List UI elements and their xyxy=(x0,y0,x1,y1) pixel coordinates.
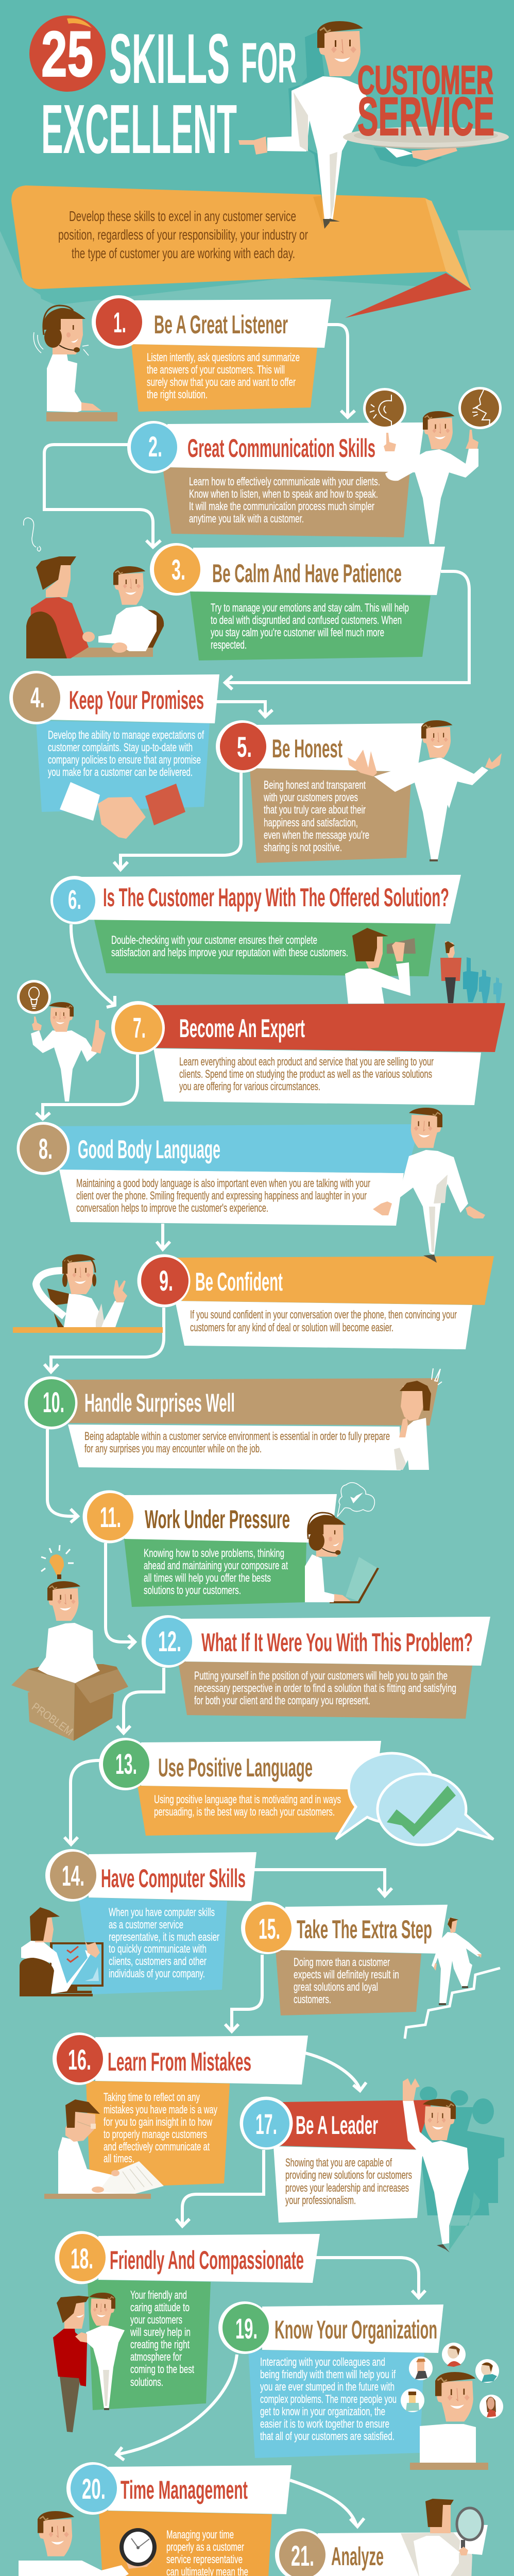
skill 19 text: that all of your customers are satisfied. xyxy=(260,2430,395,2443)
skill 14 number badge: 14. xyxy=(62,1859,84,1892)
skill 11 text: Knowing how to solve problems, thinking xyxy=(144,1547,284,1560)
skill 6 number badge: 6. xyxy=(68,885,81,915)
arrow 18 to 19 xyxy=(316,2258,425,2298)
skill 4 text: you make for a customer can be delivered. xyxy=(48,766,193,778)
skill 21 number badge: 21. xyxy=(291,2539,314,2572)
intro text: Develop these skills to excel in any customer service xyxy=(69,208,296,224)
skill 5 title: Be Honest xyxy=(272,734,342,763)
skill 8 body panel xyxy=(59,1170,404,1226)
skill 8 text: conversation helps to improve the customer's experience. xyxy=(76,1201,268,1214)
skill 18 xyxy=(53,2231,425,2432)
skill 5 text: happiness and satisfaction, xyxy=(264,816,358,829)
illustration: small figures xyxy=(440,941,502,1003)
skill 7 number badge: 7. xyxy=(133,1011,146,1044)
skill 17 body panel xyxy=(273,2146,423,2223)
illustration: honest man with open arms xyxy=(348,720,502,861)
skill 1 number badge xyxy=(92,295,145,349)
skill 20 header band xyxy=(108,2465,292,2514)
skill 13 title: Use Positive Language xyxy=(158,1753,313,1782)
skill 7 header band xyxy=(152,1003,505,1052)
skill 12 header band xyxy=(180,1617,490,1666)
skill 19 text: you are ever stumped in the future with xyxy=(260,2380,395,2393)
skill 12 number badge xyxy=(142,1615,194,1668)
team silhouettes xyxy=(420,2087,504,2250)
skill 2 text: Learn how to effectively communicate with your clients. xyxy=(189,475,380,488)
skill 20 xyxy=(10,2462,364,2576)
skill 8 title: Good Body Language xyxy=(78,1135,220,1164)
skill 10 title: Handle Surprises Well xyxy=(84,1388,235,1417)
skill 11 title: Work Under Pressure xyxy=(145,1505,290,1534)
skill 13 number badge xyxy=(99,1738,151,1790)
skill 19 xyxy=(116,2301,503,2470)
skill 5 body panel xyxy=(250,768,412,863)
skill 15 number badge: 15. xyxy=(259,1912,280,1945)
skill 15 text xyxy=(294,1956,399,2006)
skill 6 xyxy=(50,875,502,1007)
skill 14 text: to quickly communicate with xyxy=(109,1942,207,1955)
skill 7 title: Become An Expert xyxy=(179,1014,305,1043)
skill 18 header band xyxy=(98,2234,320,2283)
arrow 9 to 10 xyxy=(44,1308,164,1372)
header background panel xyxy=(0,0,514,305)
illustration: man in problem box xyxy=(11,1545,128,1741)
icon: light bulb xyxy=(41,1545,74,1579)
skill 12 body panel xyxy=(178,1662,472,1719)
skill 14 text: individuals of your company. xyxy=(109,1967,205,1980)
skill 5 text: sharing is not positive. xyxy=(264,841,342,854)
skill 17 header band xyxy=(280,2100,433,2149)
skill 3 body panel xyxy=(190,591,431,660)
skill 5 header band xyxy=(252,723,424,772)
skill 16 xyxy=(44,2032,366,2199)
skill 2 number badge: 2. xyxy=(148,430,162,463)
skill 14 text xyxy=(109,1906,219,1980)
skill 15 text: customers. xyxy=(294,1993,331,2006)
skill 17 text: providing new solutions for customers xyxy=(285,2168,412,2181)
skill 11 text: solutions to your customers. xyxy=(144,1584,241,1597)
skill 6 text: Double-checking with your customer ensures their complete xyxy=(111,934,317,946)
skill 16 number badge xyxy=(53,2032,105,2085)
skill 4 body panel xyxy=(36,721,210,812)
skill 4 number badge: 4. xyxy=(30,681,45,714)
icon: question mark doodle xyxy=(24,518,41,551)
skill 17 number badge xyxy=(240,2097,293,2149)
skill 2 text: It will make the communication process much simpler xyxy=(189,500,374,513)
skill 7 xyxy=(17,980,505,1119)
skill 6 text xyxy=(111,934,348,959)
title xyxy=(29,15,297,168)
icon: ear badge xyxy=(363,388,406,429)
skill 14 text: When you have computer skills xyxy=(109,1906,215,1919)
illustration: man with magnifier xyxy=(414,2499,488,2576)
skill 9 title: Be Confident xyxy=(195,1267,283,1296)
skill 20 text xyxy=(124,2528,261,2576)
arrow 19 to 20 xyxy=(116,2354,237,2460)
skill 14 text: representative, it is much easier xyxy=(109,1930,219,1943)
illustration: man with colleagues xyxy=(401,2343,503,2470)
skill 11 number badge: 11. xyxy=(100,1501,121,1533)
skill 11 text xyxy=(144,1547,288,1597)
illustration: surprised man xyxy=(394,1368,442,1470)
skill 21 xyxy=(143,2499,488,2576)
skill 6 number badge xyxy=(50,876,99,924)
arrow 13 to 14 xyxy=(64,1760,99,1844)
skill 9 xyxy=(13,1254,494,1372)
arrow 2 to 3 xyxy=(44,445,161,547)
skill 15 text: expects will definitely result in xyxy=(294,1968,399,1981)
skill 14 body panel xyxy=(79,1897,227,1994)
skill 2 text: anytime you talk with a customer. xyxy=(189,512,304,525)
skill 6 text: satisfaction and helps improve your reputation with these customers. xyxy=(111,946,348,959)
skill 1 text xyxy=(147,351,300,401)
illustration: handshake xyxy=(60,782,185,839)
illustration: two friendly men xyxy=(53,2293,125,2432)
skill 12 xyxy=(11,1545,490,1741)
skill 13 body panel xyxy=(138,1786,355,1836)
skill 17 text: Showing that you are capable of xyxy=(285,2156,392,2169)
skill 19 text: easier it is to work together to ensure xyxy=(260,2417,389,2430)
skill 11 text: all times will help you offer the bests xyxy=(144,1571,271,1584)
skill 16 text: all times. xyxy=(104,2152,134,2165)
skill 12 text: for both your client and the company you represent. xyxy=(194,1694,370,1707)
skill 18 text: Your friendly and xyxy=(130,2289,187,2301)
skill 19 text: Interacting with your colleagues and xyxy=(260,2355,385,2368)
skill 8 text xyxy=(76,1177,370,1214)
skill 12 text xyxy=(194,1669,456,1707)
skill 10 text xyxy=(84,1430,390,1455)
illustration: meditating agent and customer xyxy=(26,556,164,658)
skill 3 text: you stay calm you're customer will feel much more xyxy=(211,626,384,639)
skill 5 text: Being honest and transparent xyxy=(264,778,366,791)
skill 3 xyxy=(26,543,469,689)
skill 20 number badge: 20. xyxy=(82,2472,106,2505)
skill 14 text: clients, customers and other xyxy=(109,1955,207,1968)
skill 1 text: Listen intently, ask questions and summarize xyxy=(147,351,300,364)
skill 19 body panel xyxy=(248,2350,424,2458)
skill 5 text: that you truly care about their xyxy=(264,803,366,816)
skill 20 number badge xyxy=(66,2462,119,2515)
arrow 11 to 12 xyxy=(106,1543,135,1649)
skill 4 xyxy=(9,671,272,839)
skill 18 text xyxy=(130,2289,194,2388)
skill 9 body panel xyxy=(175,1301,472,1349)
skill 1 text: the right solution. xyxy=(147,388,208,401)
skill 13 number badge: 13. xyxy=(115,1748,137,1780)
skill 3 number badge xyxy=(150,543,202,596)
skill 1 number badge: 1. xyxy=(113,306,126,338)
skill 18 body panel xyxy=(88,2280,211,2410)
skill 16 number badge: 16. xyxy=(68,2043,91,2076)
title: customer service xyxy=(357,57,494,147)
intro text: the type of customer you are working with each day. xyxy=(72,245,295,261)
skill 14 xyxy=(20,1849,392,1996)
illustration: agent at computer monitor xyxy=(20,1907,104,1996)
skill 10 header band xyxy=(65,1378,439,1426)
skill 3 header band xyxy=(190,547,445,595)
skill 12 number badge: 12. xyxy=(158,1625,181,1657)
skill 20 body panel xyxy=(99,2511,272,2576)
skill 3 text xyxy=(211,601,409,651)
skill 15 body panel xyxy=(276,1950,421,2015)
skill 21 header band xyxy=(315,2532,472,2576)
skill 19 text xyxy=(260,2355,397,2443)
skill 7 number badge xyxy=(111,1001,165,1055)
skill 16 title: Learn From Mistakes xyxy=(108,2047,251,2076)
skill 18 number badge xyxy=(55,2231,108,2284)
skill 2 text xyxy=(189,475,380,525)
skill 8 xyxy=(16,1122,420,1249)
skill 16 text: for you to gain insight in to how xyxy=(104,2115,212,2128)
skill 8 number badge: 8. xyxy=(39,1132,53,1165)
skill 19 number badge xyxy=(218,2301,271,2354)
skill 16 text: mistakes you have made is a way xyxy=(104,2103,217,2116)
skill 10 text: for any surprises you may encounter while on the job. xyxy=(84,1442,262,1455)
skill 10 body panel xyxy=(68,1425,401,1470)
skill 16 text: Taking time to reflect on any xyxy=(104,2091,200,2104)
skill 5 number badge: 5. xyxy=(237,731,252,763)
icon: light bulb badge xyxy=(17,980,51,1014)
skill 18 number badge: 18. xyxy=(71,2242,93,2275)
skill 13 text: persuading, is the best way to reach your customers. xyxy=(154,1805,335,1818)
skill 5 number badge xyxy=(216,720,268,773)
skill 19 text: complex problems. The more people you xyxy=(260,2393,397,2405)
skill 19 header band xyxy=(262,2304,443,2353)
illustration: man with binoculars xyxy=(345,928,416,1004)
skill 2 text: Know when to listen, when to speak and how to speak. xyxy=(189,487,378,500)
arrow 3 to 4 xyxy=(225,571,469,689)
illustration: man with idea xyxy=(17,980,106,1101)
intro text: position, regardless of your responsibility, your industry or xyxy=(58,227,308,243)
skill 19 number badge: 19. xyxy=(235,2312,258,2345)
skill 7 text: you are offering for various circumstances. xyxy=(179,1080,320,1093)
skill 4 text: company policies to ensure that any promise xyxy=(48,753,201,766)
skill 1 text: surely show that you care and want to offer xyxy=(147,376,296,388)
illustration: man climbing stairs xyxy=(405,1918,500,2039)
skill 1 title: Be A Great Listener xyxy=(154,310,288,339)
skill 4 text: Develop the ability to manage expectations of xyxy=(48,728,204,741)
skill 19 text: being friendly with them will help you if xyxy=(260,2368,396,2381)
arrow 20 to 21 xyxy=(290,2480,364,2527)
arrow 16 to 17 xyxy=(305,2053,366,2091)
skill 2 header band xyxy=(167,422,424,472)
skill 8 text: client over the phone. Smiling frequently and expressing happiness and laughter in your xyxy=(76,1189,367,1202)
skill 6 header band xyxy=(74,875,461,924)
skill 9 text: customers for any kind of deal or solution will become easier. xyxy=(190,1321,393,1334)
skill 2 body panel xyxy=(163,467,410,537)
skill 16 body panel xyxy=(86,2081,230,2188)
illustration: speech bubbles with check xyxy=(336,1753,493,1845)
skill 8 header band xyxy=(59,1124,420,1173)
skill 20 text: service representative xyxy=(166,2553,243,2566)
skill 18 text: atmosphere for xyxy=(130,2350,182,2363)
skill 8 text: Maintaining a good body language is also important even when you are talking with your xyxy=(76,1177,370,1190)
skill 17 text xyxy=(285,2156,412,2207)
skill 4 text: customer complaints. Stay up-to-date with xyxy=(48,741,193,754)
arrow 1 to 2 xyxy=(328,325,355,417)
skill 15 number badge xyxy=(241,1902,294,1954)
skill 3 text: respected. xyxy=(211,638,247,651)
arrow 14 to 15 xyxy=(254,1870,392,1896)
skill 5 text xyxy=(263,778,369,854)
skill 18 title: Friendly And Compassionate xyxy=(110,2246,304,2275)
skill 16 text: and effectively communicate at xyxy=(104,2140,210,2153)
skill 10 number badge xyxy=(25,1377,77,1429)
skill 5 text: even when the message you're xyxy=(264,828,369,841)
skill 13 xyxy=(64,1738,493,1845)
skill 1 body panel xyxy=(131,344,317,412)
skill 15 text: great solutions and loyal xyxy=(294,1980,378,1993)
illustration: agent at laptop xyxy=(305,1513,379,1603)
skill 11 header band xyxy=(125,1494,337,1543)
skill 9 header band xyxy=(177,1256,494,1305)
illustration: man with ear and mouth badges xyxy=(363,387,502,544)
skill 21 number badge xyxy=(275,2529,328,2576)
box label: PROBLEM xyxy=(29,1700,76,1738)
skill 5 text: with your customers proves xyxy=(263,791,358,804)
skill 1 header band xyxy=(131,299,331,348)
skill 11 body panel xyxy=(124,1539,306,1607)
skill 11 text: ahead and maintaining your composure at xyxy=(144,1559,288,1572)
intro text xyxy=(58,208,308,261)
skill 15 text: Doing more than a customer xyxy=(294,1956,390,1969)
skill 4 text xyxy=(48,728,204,778)
skill 3 text: to deal with disgruntled and confused customers. When xyxy=(211,614,402,626)
illustration: confident agent on desk xyxy=(13,1255,163,1333)
icon: thought cloud with check xyxy=(337,1483,374,1517)
skill 11 number badge xyxy=(82,1490,136,1544)
skill 2 xyxy=(24,387,502,551)
waiter illustration xyxy=(238,21,509,229)
skill 4 header band xyxy=(49,674,219,723)
arrow 17 to 18 xyxy=(176,2150,264,2226)
skill 7 body panel xyxy=(153,1048,481,1105)
skill 16 text xyxy=(104,2091,217,2165)
arrow 12 to 13 xyxy=(117,1668,164,1733)
skill 8 number badge xyxy=(16,1122,70,1175)
icon: speaking mouth badge xyxy=(458,387,502,429)
text: FOR xyxy=(241,31,297,95)
illustration: headset agent xyxy=(33,306,117,421)
skill 19 text: get to know in your organization, the xyxy=(260,2405,385,2418)
illustration: man reviewing paper xyxy=(44,2099,164,2199)
skill 17 xyxy=(176,2078,504,2252)
skill 18 text: your customers xyxy=(130,2313,182,2326)
skill 14 header band xyxy=(89,1852,256,1901)
title words xyxy=(41,20,297,168)
intro banner xyxy=(11,185,471,318)
arrow 15 to 16 xyxy=(225,1955,262,2031)
arrow 5 to 6 xyxy=(114,773,241,870)
skill 17 title: Be A Leader xyxy=(296,2111,378,2140)
skill 11 xyxy=(82,1483,379,1649)
skill 3 text: Try to manage your emotions and stay calm. This will help xyxy=(211,601,409,614)
skill 4 number badge xyxy=(9,671,63,724)
skill 20 title: Time Management xyxy=(121,2476,248,2504)
arrow 4 to 5 xyxy=(216,702,272,717)
skill 6 body panel xyxy=(94,920,436,976)
skill 1 text: the answers of your customers. This will xyxy=(147,363,285,376)
skill 13 header band xyxy=(141,1741,381,1790)
skill 14 text: as a customer service xyxy=(109,1918,183,1931)
skill 14 title: Have Computer Skills xyxy=(101,1864,246,1893)
skill 4 title: Keep Your Promises xyxy=(69,686,204,715)
skill 18 text: caring attitude to xyxy=(130,2301,190,2314)
title words: SKILLS xyxy=(109,20,230,98)
arrow 7 to 8 xyxy=(36,1055,138,1119)
skill 17 text: proves your leadership and increases xyxy=(285,2181,409,2194)
title 25 badge: 25 xyxy=(41,19,93,90)
skill 9 number badge xyxy=(137,1254,191,1308)
icon: clock xyxy=(119,2528,157,2566)
skill 15 xyxy=(225,1902,500,2039)
illustration: man holding clock xyxy=(10,2511,157,2576)
skill 5 xyxy=(114,720,502,870)
skill 1 xyxy=(33,295,355,421)
illustration: man with open hands, skill 8 xyxy=(373,1108,485,1263)
skill 20 text: properly as a customer xyxy=(166,2540,244,2553)
skill 14 number badge xyxy=(45,1849,98,1902)
skill 16 header band xyxy=(95,2036,308,2084)
skill 18 text: creating the right xyxy=(130,2338,190,2351)
skill 7 text xyxy=(179,1055,434,1093)
skill 10 xyxy=(25,1368,442,1522)
skill 13 text: Using positive language that is motivating and in ways xyxy=(154,1793,341,1806)
skill 10 number badge: 10. xyxy=(43,1386,64,1418)
skill 16 text: to properly manage customers xyxy=(104,2128,207,2141)
colleague avatars xyxy=(401,2343,503,2418)
skill 18 text: will surely help in xyxy=(130,2326,191,2338)
arrow 8 to 9 xyxy=(157,1224,170,1249)
skill 2 number badge xyxy=(127,421,180,473)
skill 17 number badge: 17. xyxy=(255,2108,277,2140)
arrow 6 to 7 xyxy=(71,924,115,1007)
illustration: leader raising hand xyxy=(403,2078,469,2252)
skill 13 text xyxy=(154,1793,341,1818)
skill 17 text: your professionalism. xyxy=(285,2194,356,2207)
skill 21 title: Analyze xyxy=(331,2542,384,2571)
skill 18 text: solutions. xyxy=(130,2376,163,2388)
skill 20 text: Managing your time xyxy=(166,2528,234,2541)
skill 9 text xyxy=(190,1308,457,1334)
title words: EXCELLENT xyxy=(41,90,237,168)
skill 18 text: coming to the best xyxy=(130,2363,194,2376)
skill 3 number badge: 3. xyxy=(172,553,185,586)
skill 15 header band xyxy=(279,1905,448,1954)
skill 9 number badge: 9. xyxy=(159,1264,173,1297)
arrow 10 to 11 xyxy=(47,1429,78,1522)
